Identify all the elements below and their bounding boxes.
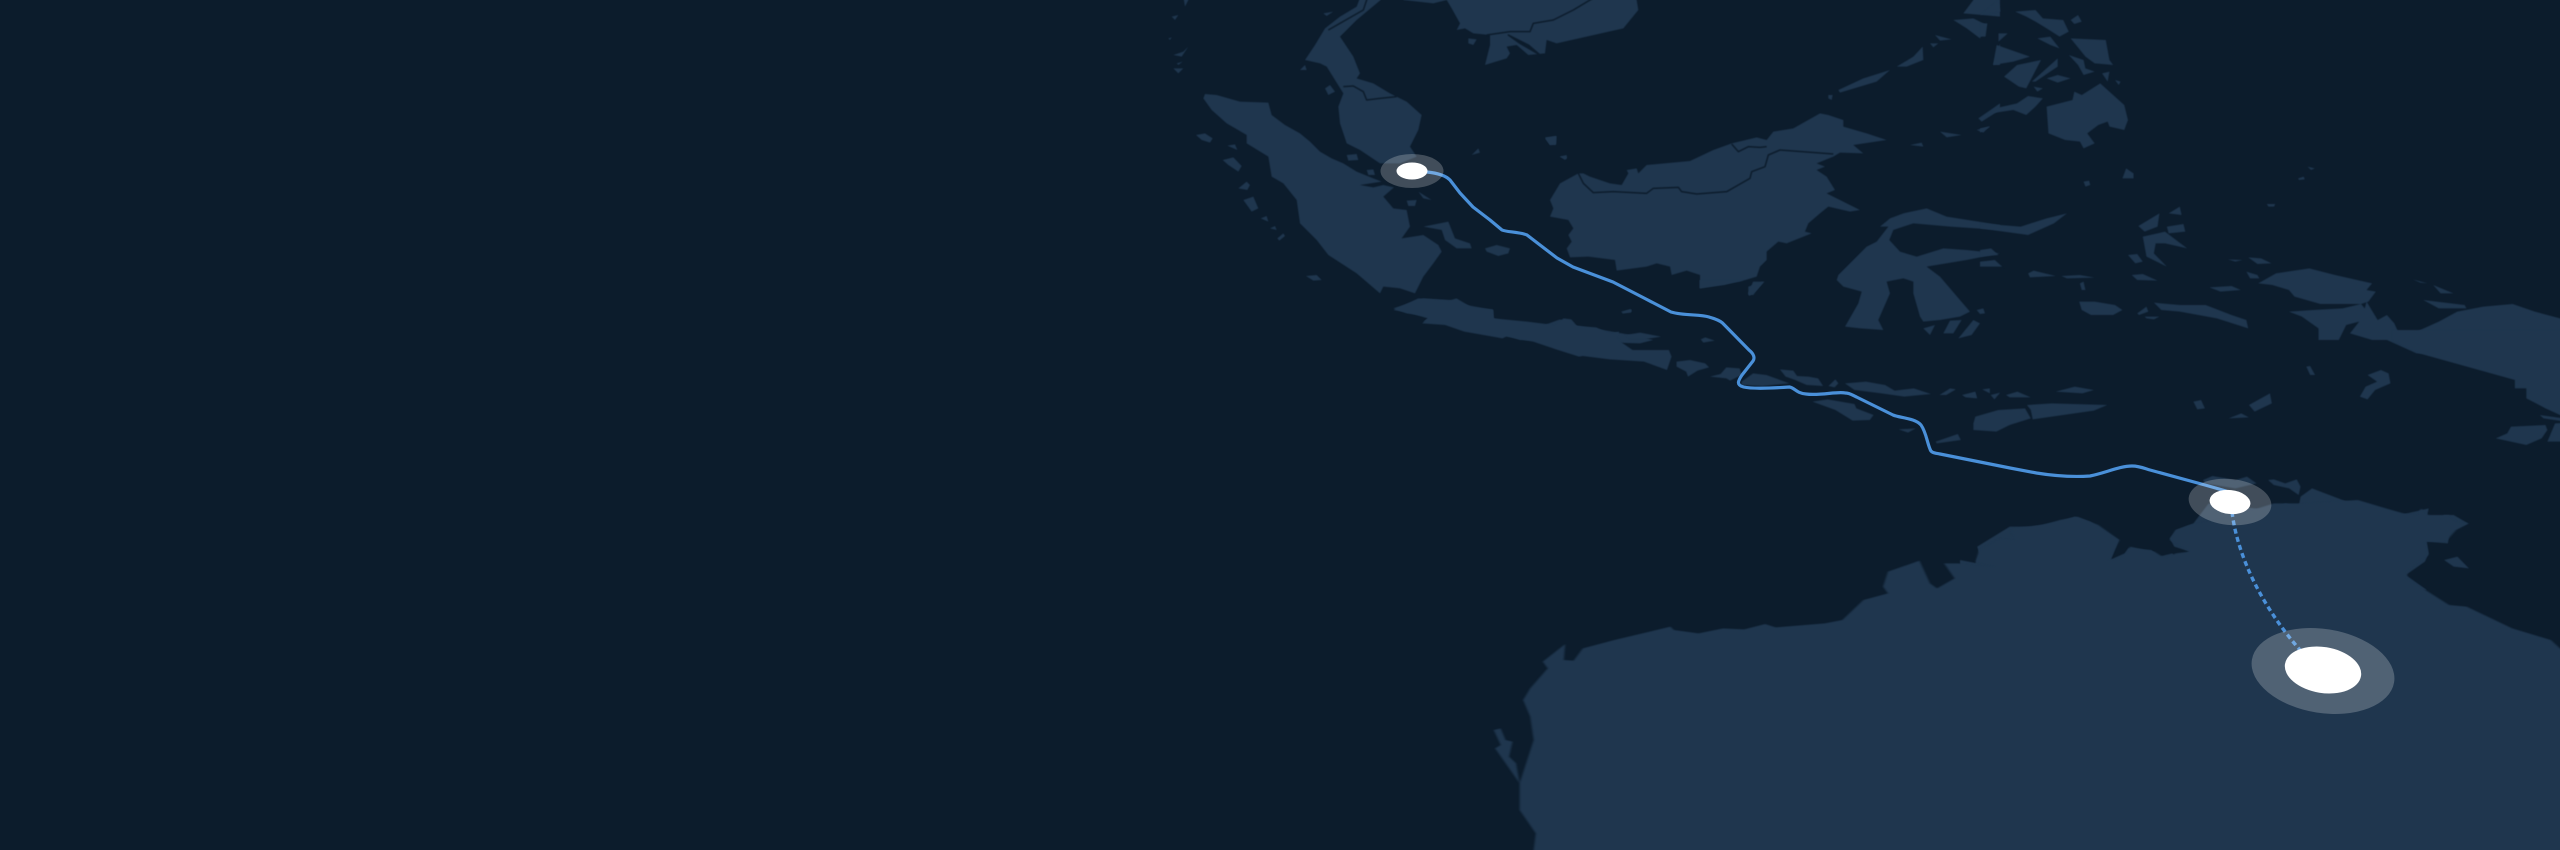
marker: northern Australia landing point	[2186, 475, 2274, 529]
marker: origin in Sumatra	[1380, 154, 1444, 188]
route: dashed overland line to the inland site	[2232, 512, 2300, 650]
marker: inland destination	[2245, 618, 2401, 724]
land: Philippines, Moluccas and New Guinea	[1980, 0, 2560, 353]
land: Australia	[1494, 500, 2560, 850]
land: Borneo and Sulawesi	[1545, 0, 2000, 338]
land: Java and the Lesser Sunda Islands	[1393, 280, 1976, 443]
land: Timor, Arafura Sea islands and southern New Guinea	[1960, 330, 2560, 590]
route: solid sea line from Sumatra to northern Australia	[1427, 172, 2226, 491]
land: Sumatra, Malay Peninsula and Indochina	[1168, 0, 1653, 343]
